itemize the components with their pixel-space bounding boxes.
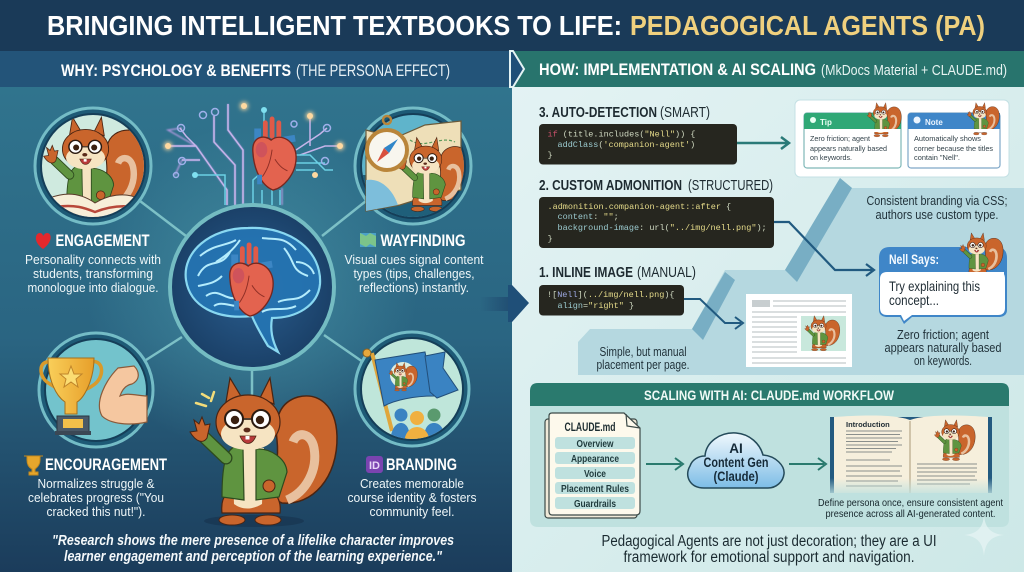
wayfinding heading: WAYFINDING bbox=[380, 231, 466, 250]
callout text: concept... bbox=[889, 292, 939, 308]
encouragement medallion bbox=[39, 333, 153, 447]
engagement body: monologue into dialogue. bbox=[28, 280, 158, 295]
step 1 code block: ![Nell](../img/nell.png){ bbox=[547, 290, 675, 300]
wayfinding body: Visual cues signal content bbox=[344, 252, 484, 267]
branding body: community feel. bbox=[370, 504, 454, 519]
branding caption: authors use custom type. bbox=[876, 207, 998, 222]
workflow caption: presence across all AI-generated content. bbox=[826, 509, 996, 520]
encouragement heading: ENCOURAGEMENT bbox=[45, 455, 167, 474]
branding body: Creates memorable bbox=[360, 476, 464, 491]
engagement body: Personality connects with bbox=[25, 252, 161, 267]
callout text: Try explaining this bbox=[889, 278, 980, 294]
icon: purple badge bbox=[366, 456, 383, 473]
step 1 code block bbox=[539, 285, 684, 316]
open book: Introduction bbox=[846, 420, 890, 429]
background: left panel bbox=[0, 51, 514, 572]
tip card: Tip bbox=[820, 118, 832, 127]
branding medallion bbox=[355, 332, 469, 446]
claude.md document: Placement Rules bbox=[561, 483, 629, 495]
callout title: Nell Says: bbox=[889, 251, 939, 267]
arrow: cloud to book bbox=[789, 458, 826, 470]
icon: red heart bbox=[36, 233, 51, 249]
staircase background bbox=[578, 178, 1024, 375]
claude.md document: CLAUDE.md bbox=[564, 420, 616, 434]
step 3 code block: addClass('companion-agent') bbox=[558, 140, 695, 150]
claude.md document: Overview bbox=[576, 438, 614, 450]
step 1: inline image bbox=[539, 265, 696, 316]
sparkle mark bbox=[964, 515, 1004, 556]
title highlight: PEDAGOGICAL AGENTS (PA) bbox=[630, 10, 985, 41]
note card: Automatically shows bbox=[914, 134, 981, 143]
step 1 caption: Simple, but manual bbox=[600, 344, 687, 359]
benefit: engagement bbox=[25, 108, 161, 295]
benefit: encouragement bbox=[24, 333, 167, 519]
title banner bbox=[0, 0, 1024, 51]
wayfinding body: types (tips, challenges, bbox=[354, 266, 474, 281]
page mock-up bbox=[746, 294, 852, 367]
step 1 code block: align="right" } bbox=[558, 301, 634, 311]
workflow caption: Define persona once, ensure consistent agent bbox=[818, 498, 1003, 509]
trophy bbox=[41, 361, 102, 392]
icon: neural network tree bbox=[164, 102, 344, 205]
brain illustration bbox=[186, 228, 320, 352]
callout caption: appears naturally based bbox=[884, 340, 1002, 355]
callout caption: Zero friction; agent bbox=[897, 327, 989, 342]
title text: BRINGING INTELLIGENT TEXTBOOKS TO LIFE: bbox=[47, 10, 622, 41]
ai cloud bbox=[688, 433, 784, 488]
encouragement body: cracked this nut!"). bbox=[46, 504, 146, 519]
claude.md document: Voice bbox=[584, 468, 606, 480]
step 3 code block: } bbox=[548, 150, 553, 160]
claude.md document: Guardrails bbox=[574, 498, 616, 510]
background: right panel bbox=[512, 51, 1024, 572]
step 2 code block: } bbox=[548, 234, 553, 244]
note card: corner because the titles bbox=[914, 144, 993, 153]
arrow: step 2 to callout bbox=[774, 222, 874, 276]
arrow: step 1 to page bbox=[684, 299, 743, 329]
wayfinding body: reflections) instantly. bbox=[359, 280, 469, 295]
step 3: auto-detection bbox=[539, 105, 737, 164]
claude.md document: Appearance bbox=[571, 453, 619, 465]
engagement heading: ENGAGEMENT bbox=[56, 231, 150, 250]
note card bbox=[908, 103, 1000, 168]
icon: map bbox=[360, 233, 376, 247]
arrow: step 3 to cards bbox=[737, 137, 789, 149]
tip card: appears naturally based bbox=[810, 144, 887, 153]
step 1 tag: (MANUAL) bbox=[637, 265, 696, 281]
step 2 code block: content: ""; bbox=[558, 212, 619, 222]
nell says callout bbox=[879, 233, 1007, 324]
step 2: custom admonition bbox=[539, 178, 774, 248]
mascot squirrel shadow bbox=[204, 515, 304, 527]
step 2 code block bbox=[539, 197, 774, 248]
header chevron bbox=[510, 51, 524, 87]
callout squirrel bbox=[959, 233, 1003, 277]
mascot sparks bbox=[196, 392, 214, 406]
step 1 heading: 1. INLINE IMAGE bbox=[539, 265, 633, 281]
note card: contain "Nell". bbox=[914, 153, 960, 162]
benefit: branding bbox=[348, 332, 477, 519]
central brain medallion bbox=[170, 205, 334, 369]
step 3 tag: (SMART) bbox=[660, 105, 710, 121]
center glow bbox=[87, 125, 417, 455]
ai cloud: (Claude) bbox=[714, 469, 758, 484]
research quote: learner engagement and perception of the learning experience." bbox=[64, 548, 443, 565]
step 2 code block: background-image: url("../img/nell.png"); bbox=[558, 223, 767, 233]
benefit: wayfinding bbox=[344, 108, 484, 295]
left section header bbox=[0, 51, 512, 87]
encouragement body: celebrates progress ("You bbox=[28, 490, 164, 505]
tip card: Zero friction; agent bbox=[810, 134, 871, 143]
step 2 heading: 2. CUSTOM ADMONITION bbox=[539, 178, 682, 194]
closing statement: Pedagogical Agents are not just decoration; they are a UI bbox=[602, 533, 936, 550]
admonition examples panel bbox=[795, 100, 1009, 177]
mascot squirrel bbox=[190, 378, 337, 525]
community people bbox=[391, 408, 442, 439]
callout caption: on keywords. bbox=[914, 353, 972, 368]
open book bbox=[826, 415, 996, 497]
icon: heart above brain bbox=[253, 119, 296, 190]
ai cloud: AI bbox=[729, 441, 743, 456]
step 1 caption: placement per page. bbox=[596, 357, 690, 372]
left header light text: (THE PERSONA EFFECT) bbox=[296, 61, 450, 80]
branding heading: BRANDING bbox=[386, 455, 457, 474]
engagement medallion bbox=[35, 108, 151, 225]
arrow: doc to cloud bbox=[646, 458, 683, 470]
left header bold text: WHY: PSYCHOLOGY & BENEFITS bbox=[61, 61, 291, 80]
step 2 code block: .admonition.companion-agent::after { bbox=[548, 202, 731, 212]
claude.md document bbox=[545, 413, 640, 518]
branding body: course identity & fosters bbox=[348, 490, 477, 505]
workflow panel bbox=[530, 383, 1009, 527]
right header bold text: HOW: IMPLEMENTATION & AI SCALING bbox=[539, 60, 816, 79]
closing statement: framework for emotional support and navigation. bbox=[624, 549, 914, 566]
flexed arm bbox=[99, 366, 147, 424]
right section header bbox=[510, 51, 1024, 87]
step 3 heading: 3. AUTO-DETECTION bbox=[539, 105, 657, 121]
research quote: "Research shows the mere presence of a lifelike character improves bbox=[52, 532, 454, 549]
ai cloud: Content Gen bbox=[704, 455, 768, 470]
encouragement body: Normalizes struggle & bbox=[38, 476, 155, 491]
icon: small trophy bbox=[24, 456, 43, 475]
arrow: why to how bbox=[480, 285, 529, 322]
engagement body: students, transforming bbox=[33, 266, 153, 281]
wayfinding medallion bbox=[355, 108, 471, 225]
icon: purple badge: ID bbox=[369, 460, 380, 472]
note card: Note bbox=[925, 118, 943, 127]
step 3 code block bbox=[539, 124, 737, 164]
step 3 code block: if (title.includes("Nell")) { bbox=[548, 130, 695, 140]
icon: heart in brain bbox=[230, 245, 273, 316]
tip card: on keywords. bbox=[810, 153, 852, 162]
step 2 tag: (STRUCTURED) bbox=[688, 178, 773, 194]
workflow heading: SCALING WITH AI: CLAUDE.md WORKFLOW bbox=[644, 387, 895, 403]
tip card bbox=[804, 103, 901, 168]
connector lines from brain to benefits bbox=[140, 201, 366, 395]
